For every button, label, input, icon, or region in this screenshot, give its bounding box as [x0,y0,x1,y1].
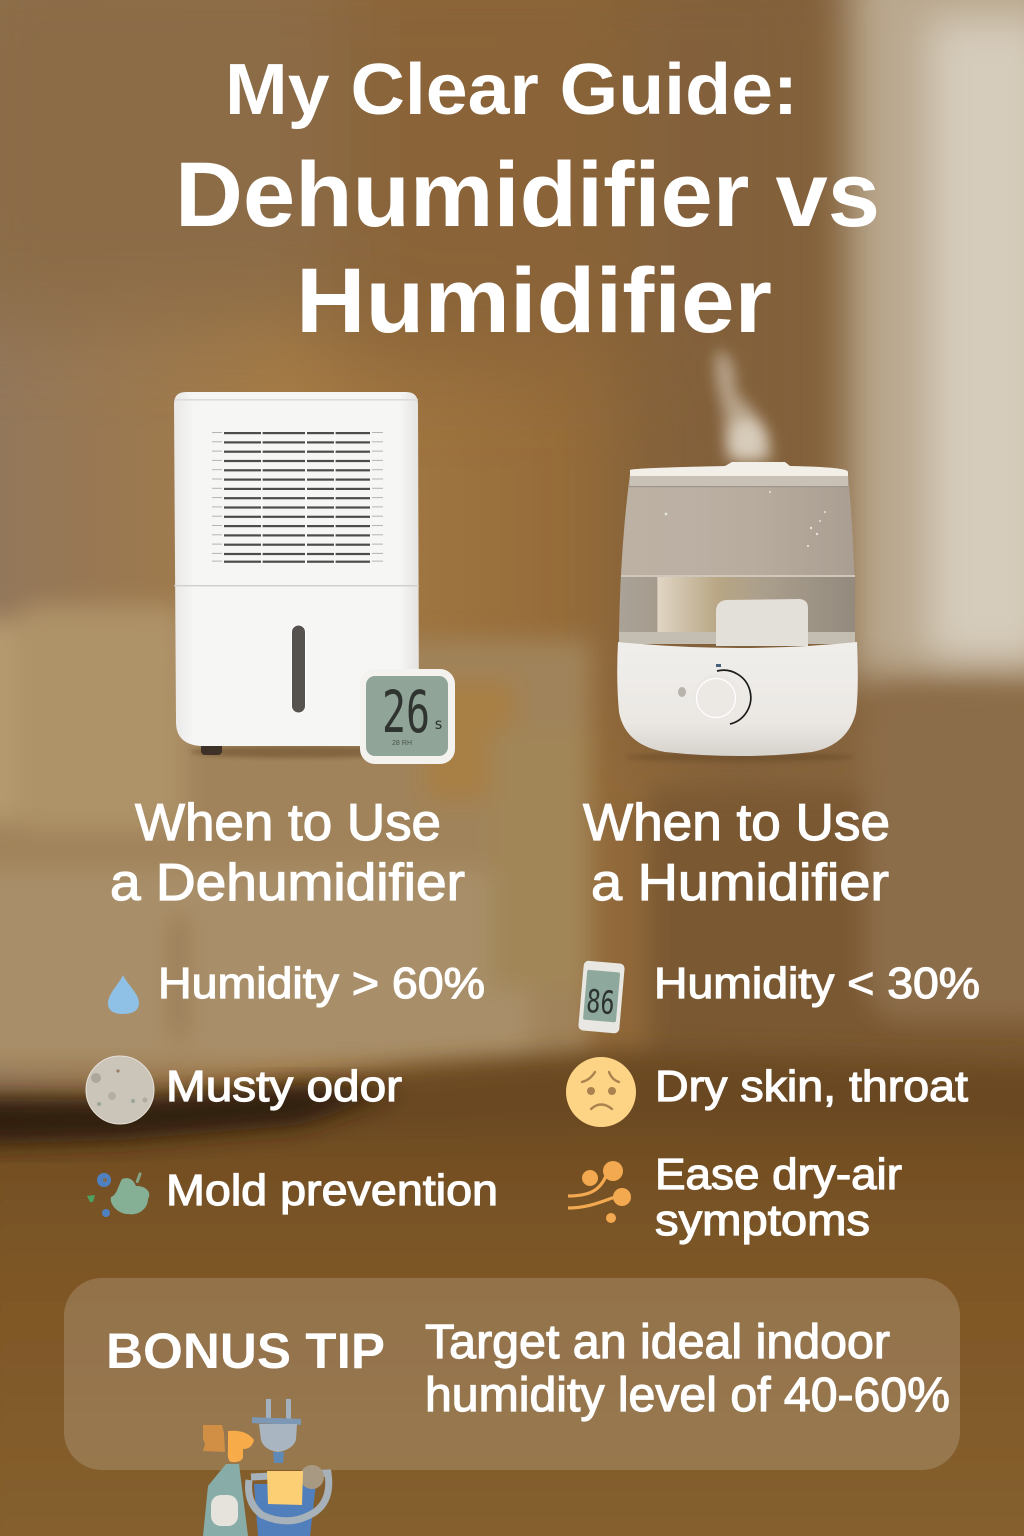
icon: orange air wisps [568,1161,631,1223]
right heading: a Humidifier [591,854,889,912]
background: sofa [0,605,590,1070]
right item: ease dry-air symptoms: Ease dry-air [655,1150,902,1199]
dial [693,664,751,724]
icon: sad face [566,1057,636,1127]
droplets [665,491,826,547]
inner block [716,599,808,646]
title [175,50,880,352]
dehumidifier product [174,392,455,764]
base [617,642,858,756]
digital meter: 26 [382,678,430,746]
title line 1: My Clear Guide: [225,50,798,130]
digital meter: 28 RH [392,740,412,747]
panel: bonus tip [64,1278,960,1470]
bucket [254,1484,316,1536]
right heading [583,794,890,912]
right item: humidity below 30: Humidity < 30% [654,959,980,1008]
steam [715,350,772,462]
dehumidifier vent grille [212,430,383,564]
background: armchair [650,690,1024,1070]
digital meter: s [434,715,443,733]
right item: dry skin: Dry skin, throat [655,1062,968,1111]
power dot [678,687,686,697]
tank [619,474,855,640]
background: window light [850,0,1024,680]
icon: hygrometer [578,960,625,1034]
spray bottle [203,1464,248,1536]
right item: ease dry-air symptoms: symptoms [655,1196,870,1245]
title line 3: Humidifier [296,250,772,352]
title line 2: Dehumidifier vs [175,144,880,246]
left heading: When to Use [135,794,441,852]
lid [630,462,848,476]
water [619,576,855,640]
right item: ease dry-air symptoms [568,1150,902,1245]
left item: musty odor: Musty odor [166,1062,402,1111]
spray nozzle [203,1425,225,1452]
icon: hygrometer: 86 [585,982,616,1022]
left heading [110,794,465,912]
left item: humidity above 60: Humidity > 60% [158,959,485,1008]
left heading: a Dehumidifier [110,854,465,912]
bonus tip heading: BONUS TIP [106,1323,385,1379]
bonus tip text: Target an ideal indoor [425,1316,890,1369]
icon: water drop [108,975,139,1014]
left item: mold prevention: Mold prevention [166,1166,498,1215]
bonus tip text: humidity level of 40-60% [425,1369,950,1422]
icon: mold spotted disc [86,1056,154,1124]
icon: cleaning supplies, plug and bucket [203,1399,329,1536]
icon: mold spores [87,1172,149,1217]
background: floor [0,1050,1024,1536]
digital meter [360,669,455,764]
right heading: When to Use [583,794,890,852]
humidifier product [617,350,858,762]
right item: dry skin [566,1057,968,1127]
sponge [267,1471,303,1505]
plug [252,1399,301,1463]
bonus tip text [425,1316,950,1422]
water level window [292,625,306,713]
right item: humidity below 30 [578,959,980,1034]
left item: musty odor [86,1056,402,1124]
